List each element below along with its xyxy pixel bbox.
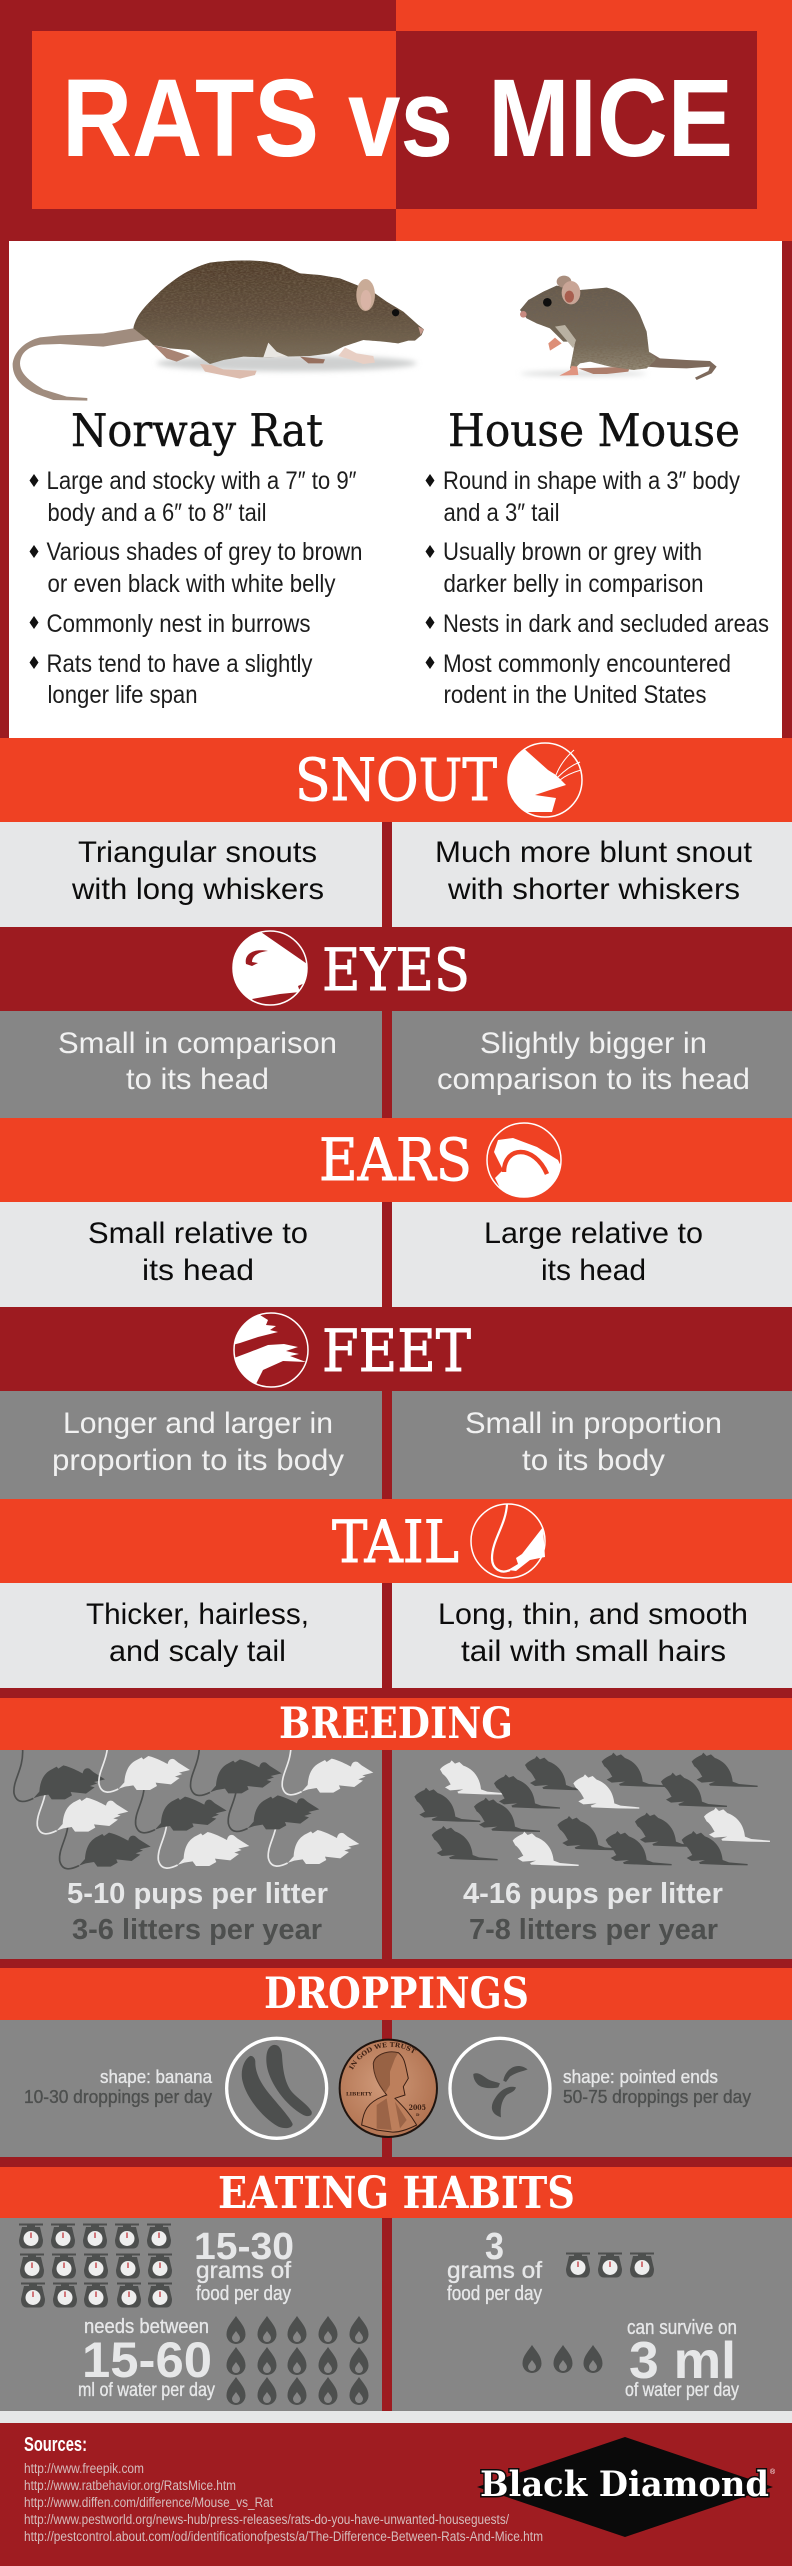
divider strip above footer [0,2411,792,2423]
panel: eyes comparison [0,1011,792,1118]
mouse water text: 3 ml [629,2332,736,2390]
sources list [24,2461,543,2544]
panel: snout comparison: Much more blunt snout [435,836,753,869]
mouse droppings text [563,2067,751,2107]
mouse food text [447,2226,543,2305]
mouse food text: grams of [447,2257,543,2283]
icons: water drops mouse [522,2345,602,2373]
icon: penny: LIBERTY [346,2092,372,2098]
icon: mouse droppings [450,2038,550,2138]
panel: ears comparison: Large relative to [484,1217,703,1250]
list: mouse facts: rodent in the United States [444,681,706,709]
icon: eyes [232,930,308,1006]
breeding stats: 4-16 pups per litter [463,1878,723,1910]
list: mouse facts: and a 3″ tail [444,499,560,527]
list: rat facts [30,467,362,709]
list: mouse facts: Most commonly encountered [443,650,731,678]
logo: black diamond: ® [770,2468,776,2476]
panel: ears comparison: its head [142,1254,254,1287]
logo: black diamond: Black Diamond [480,2464,769,2505]
breeding stats: 7-8 litters per year [469,1914,718,1946]
panel: droppings [0,2020,792,2157]
sources list: http://www.freepik.com [24,2461,144,2476]
rat food text: food per day [196,2283,291,2305]
band: eating habits [0,2167,792,2219]
rat food text: grams of [196,2257,292,2283]
rat water text: needs between [84,2316,209,2338]
icon group: rats [14,1741,373,1869]
band: tail [0,1499,792,1583]
panel: ears comparison [0,1202,792,1307]
band: droppings: DROPPINGS [264,1969,529,2019]
heading: norway rat: Norway Rat [71,404,323,457]
mouse food text: 3 [485,2226,504,2268]
mouse droppings text: 50-75 droppings per day [563,2087,751,2107]
panel: eyes comparison: Small in comparison [58,1027,337,1060]
band: ears [0,1118,792,1202]
sources list: http://www.pestworld.org/news-hub/press-releases/rats-do-you-have-unwanted-houseguests/ [24,2512,509,2527]
icon: penny: D [416,2112,420,2117]
list: rat facts: Commonly nest in burrows [46,610,310,638]
panel: tail comparison [0,1583,792,1688]
panel: breeding [0,1741,792,1959]
panel: species comparison [9,241,782,738]
breeding stats [67,1878,723,1946]
photo: norway rat [13,261,424,401]
panel: eating mouse [392,2218,792,2411]
panel: tail comparison: Long, thin, and smooth [438,1598,748,1631]
band: breeding: BREEDING [279,1699,513,1749]
band: eyes [232,930,467,1006]
band: snout [0,738,792,822]
title: vs [348,57,453,180]
icon: penny [338,2038,438,2138]
list: rat facts: body and a 6″ to 8″ tail [48,499,266,527]
list: mouse facts: Usually brown or grey with [443,538,702,566]
sources heading: Sources: [24,2434,87,2456]
panel: eyes comparison: to its head [126,1063,269,1096]
rat water text: ml of water per day [78,2380,215,2401]
band: snout: SNOUT [295,746,497,814]
band: feet [233,1312,471,1388]
sources list: http://www.ratbehavior.org/RatsMice.htm [24,2478,236,2493]
band: droppings [0,1968,792,2020]
icon: penny: 2005 [409,2103,426,2112]
panel: feet comparison: proportion to its body [52,1444,344,1477]
panel: tail comparison: and scaly tail [109,1635,286,1668]
list: mouse facts: Round in shape with a 3″ body [443,467,740,495]
rat food text: 15-30 [194,2226,294,2268]
rat water text: 15-60 [82,2332,212,2388]
panel: feet comparison [0,1391,792,1499]
list: rat facts: or even black with white belly [48,570,336,598]
rat food text [194,2226,294,2305]
icon: rat droppings [227,2038,327,2138]
title: MICE [488,57,733,180]
rat droppings text: 10-30 droppings per day [24,2087,212,2107]
panel: ears comparison: Small relative to [88,1217,308,1250]
logo: black diamond [477,2437,776,2537]
mouse water text [625,2317,739,2401]
panel: eating rat [0,2218,382,2411]
panel: feet comparison: Longer and larger in [63,1407,333,1440]
icon: ears [487,1123,565,1200]
panel: eyes comparison: Slightly bigger in [480,1027,707,1060]
sources list: http://pestcontrol.about.com/od/identificationofpests/a/The-Difference-Between-Rats-And-Mice.htm [24,2529,543,2544]
mouse food text: food per day [447,2283,542,2305]
breeding stats: 3-6 litters per year [72,1914,322,1946]
icon: penny: IN GOD WE TRUST [348,2042,416,2070]
panel: ears comparison: its head [541,1254,646,1287]
panel: feet comparison: to its body [522,1444,665,1477]
band: eating habits: EATING HABITS [218,2168,575,2219]
sources list: http://www.diffen.com/difference/Mouse_vs_Rat [24,2495,273,2510]
band: ears: EARS [319,1126,472,1194]
panel: tail comparison: Thicker, hairless, [86,1598,309,1631]
panel: snout comparison [0,822,792,927]
list: mouse facts: darker belly in comparison [444,570,704,598]
panel: eyes comparison: comparison to its head [437,1063,750,1096]
icon: tail [471,1504,545,1578]
panel: snout comparison: Triangular snouts [78,836,317,869]
band: feet: FEET [322,1317,471,1385]
band: breeding [0,1698,792,1750]
panel: tail comparison: tail with small hairs [461,1635,726,1668]
band: tail: TAIL [332,1508,459,1576]
icons: food scales mouse [566,2252,654,2278]
panel: feet comparison: Small in proportion [465,1407,722,1440]
icon group: mice [414,1753,770,1866]
band: eyes: EYES [322,936,470,1004]
list: rat facts: Large and stocky with a 7″ to 9″ [46,467,357,495]
rat water text [78,2316,215,2401]
mouse water text: can survive on [627,2317,737,2339]
list: rat facts: Rats tend to have a slightly [46,650,313,678]
icon: feet [232,1310,308,1392]
list: rat facts: longer life span [48,681,198,709]
footer [0,2423,792,2566]
title [62,57,733,180]
icons: water drops rat [226,2316,368,2405]
photo: house mouse [520,276,717,380]
rat droppings text: shape: banana [100,2067,213,2087]
title: RATS [62,57,319,180]
mouse droppings text: shape: pointed ends [563,2067,718,2087]
icons: food scales rat [19,2224,172,2308]
breeding stats: 5-10 pups per litter [67,1878,328,1910]
rat droppings text [24,2067,213,2107]
list: mouse facts [426,467,769,709]
list: rat facts: Various shades of grey to brown [46,538,362,566]
panel: snout comparison: with long whiskers [71,873,324,906]
panel: snout comparison: with shorter whiskers [447,873,740,906]
header block [32,0,792,241]
icon: snout [500,743,582,817]
mouse water text: of water per day [625,2380,739,2401]
heading: house mouse: House Mouse [448,404,740,457]
